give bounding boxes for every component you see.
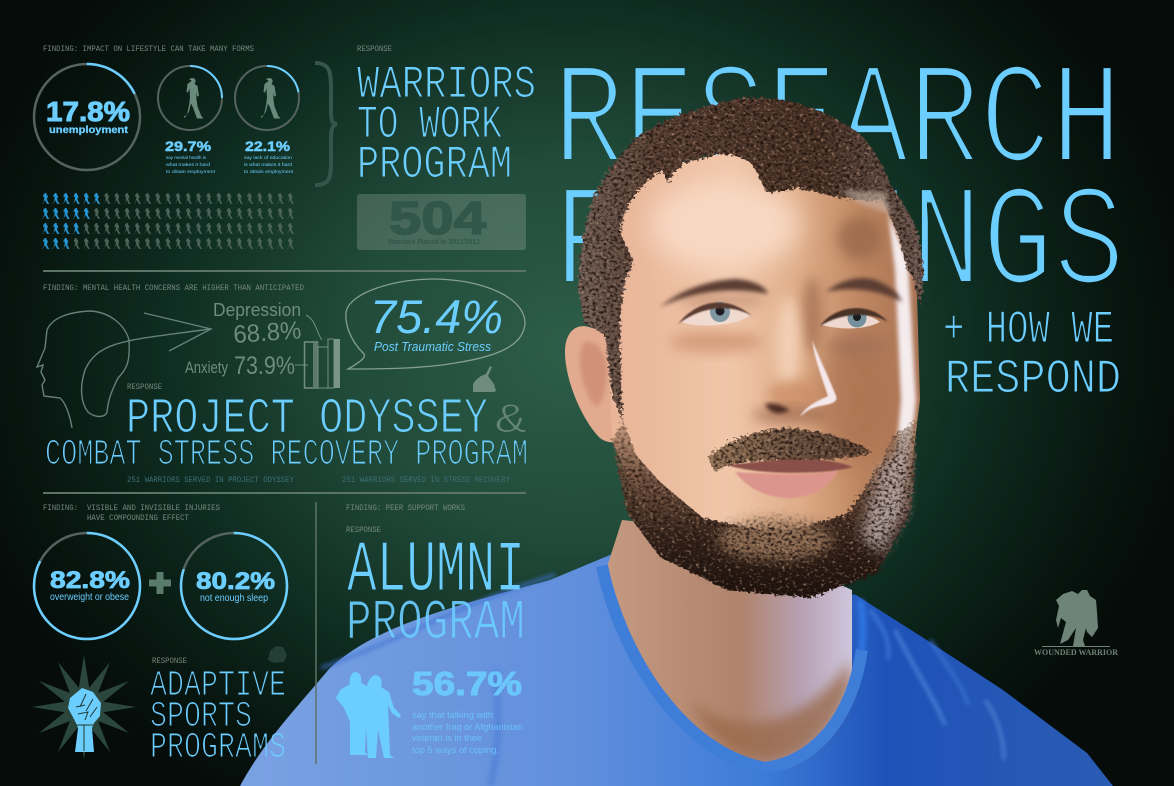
stat: 56.7%: say that talking with <box>412 710 493 721</box>
finding label: HAVE COMPOUNDING EFFECT <box>87 514 189 523</box>
stat: 29.7% <box>165 138 216 175</box>
stat: 56.7%: veteran is in their <box>412 733 482 744</box>
finding label <box>43 504 220 523</box>
badge: 504: Warriors Placed in 2011/2012 <box>388 237 480 246</box>
served counts: 251 WARRIORS SERVED IN STRESS RECOVERY <box>342 476 510 485</box>
moustache <box>708 428 872 472</box>
stat: 29.7%: to obtain employment <box>166 169 216 175</box>
ring: 82.8%: 82.8% <box>50 567 130 594</box>
ring: 82.8% <box>34 533 140 639</box>
logo: wounded warrior <box>1034 590 1119 657</box>
subtitle: how we respond: RESPOND <box>945 353 1121 407</box>
finding label: VISIBLE AND INVISIBLE INJURIES <box>87 504 220 513</box>
stat: 22.1%: 22.1% <box>245 138 291 154</box>
badge: 504 <box>357 192 526 250</box>
stat: 29.7%: say mental health is <box>166 155 207 161</box>
served counts <box>127 476 510 485</box>
face <box>606 145 920 592</box>
chart: hand drawn labels: 68.8% <box>232 316 302 349</box>
ring: 80.2%: 80.2% <box>196 568 275 595</box>
shirt folds <box>321 575 1004 786</box>
divider <box>43 492 526 494</box>
finding label: FINDING: IMPACT ON LIFESTYLE CAN TAKE MANY FORMS <box>43 45 254 54</box>
finding label: FINDING: MENTAL HEALTH CONCERNS ARE HIGHER THAN ANTICIPATED <box>43 284 304 293</box>
chart: hand drawn labels: Anxiety <box>185 358 228 377</box>
icon: tank <box>473 366 496 392</box>
panel: mental health finding <box>37 279 528 485</box>
stat: 75.4%: Post Traumatic Stress <box>374 339 491 354</box>
lips <box>727 459 853 498</box>
stat: 29.7%: what makes it hard <box>166 162 210 168</box>
panel: peer support finding <box>336 504 525 758</box>
neck <box>606 520 852 762</box>
plus <box>149 572 171 594</box>
ring: 80.2%: not enough sleep <box>200 593 268 604</box>
subtitle: how we respond: + HOW WE <box>943 304 1114 356</box>
program name: TO WORK <box>357 99 502 151</box>
program name: COMBAT STRESS RECOVERY PROGRAM <box>45 434 528 475</box>
beard <box>612 420 916 598</box>
photo: man in blue shirt <box>240 97 1113 786</box>
stat: 22.1%: to obtain employment <box>244 169 294 175</box>
response label: RESPONSE <box>127 383 162 392</box>
response label: RESPONSE <box>346 526 381 535</box>
stat: 75.4%: 75.4% <box>370 290 503 343</box>
response label: RESPONSE <box>357 45 392 54</box>
finding label: FINDING: <box>43 504 78 513</box>
eye left <box>678 302 752 326</box>
chart: hand drawn bars <box>304 339 340 388</box>
program name: SPORTS <box>150 696 252 737</box>
program name: WARRIORS <box>357 59 536 111</box>
stat: 56.7%: top 5 ways of coping. <box>412 745 499 756</box>
pictogram grid: walkers <box>42 193 294 249</box>
stat: 29.7%: 29.7% <box>165 138 212 154</box>
nostril <box>765 404 790 413</box>
program name <box>150 665 286 768</box>
panel: warriors to work response <box>357 45 536 250</box>
stat: 22.1%: is what makes it hard <box>244 162 292 168</box>
hair tips <box>840 190 892 215</box>
logo: wounded warrior: WOUNDED WARRIOR <box>1034 647 1119 657</box>
icon: two men <box>336 672 401 758</box>
program name: & <box>495 396 527 445</box>
eye right <box>820 308 888 328</box>
chart: hand drawn labels <box>185 300 322 380</box>
ring: 22.1% education <box>235 66 299 130</box>
ring: 80.2% <box>181 533 287 639</box>
response label: RESPONSE <box>152 657 187 666</box>
ring: 29.7% mental health <box>158 66 222 130</box>
program name: PROGRAMS <box>150 727 286 768</box>
stat: 56.7% <box>412 665 523 756</box>
program name <box>346 530 525 656</box>
speech bubble <box>346 279 525 369</box>
brace <box>315 63 337 185</box>
badge: 504: 504 <box>389 192 487 244</box>
program name: PROJECT ODYSSEY <box>126 391 488 448</box>
stat: 22.1%: say lack of education <box>244 155 292 161</box>
subtitle: how we respond <box>943 304 1121 407</box>
icon: head profile with arrow <box>37 311 211 428</box>
icon: star <box>32 655 136 759</box>
ring: 82.8%: overweight or obese <box>50 592 129 603</box>
program name: ADAPTIVE <box>150 665 286 706</box>
program name <box>357 59 536 191</box>
ring: 17.8% unemployment: unemployment <box>49 125 129 136</box>
neck shadow <box>690 660 850 762</box>
divider <box>43 270 526 272</box>
vertical divider <box>315 502 317 764</box>
ear <box>565 326 624 442</box>
ring: 17.8% unemployment: 17.8% <box>46 96 130 127</box>
served counts: 251 WARRIORS SERVED IN PROJECT ODYSSEY <box>127 476 294 485</box>
ring: 17.8% unemployment <box>34 64 140 170</box>
program name: ALUMNI <box>347 530 525 612</box>
program name: PROGRAM <box>357 139 512 191</box>
icon: fist <box>68 688 101 752</box>
shirt <box>240 550 1113 786</box>
collar <box>602 566 862 768</box>
stat: 56.7%: 56.7% <box>412 665 522 702</box>
stat: 22.1% <box>244 138 294 175</box>
panel: lifestyle finding <box>34 45 337 249</box>
eyebrows <box>660 278 902 307</box>
title: research findings <box>553 42 1125 327</box>
chart: hand drawn labels: Depression <box>213 300 301 320</box>
face shading <box>650 180 916 490</box>
program name: PROGRAM <box>346 592 525 656</box>
finding label: FINDING: PEER SUPPORT WORKS <box>346 504 465 513</box>
program name <box>45 391 528 475</box>
ear inner <box>580 342 607 406</box>
stat: 56.7%: another Iraq or Afghanistan <box>412 722 523 733</box>
hair <box>578 97 923 420</box>
panel: injuries finding <box>32 504 287 768</box>
splat <box>268 646 287 663</box>
nose highlight <box>800 340 836 417</box>
chart: hand drawn labels: 73.9% <box>234 352 295 380</box>
